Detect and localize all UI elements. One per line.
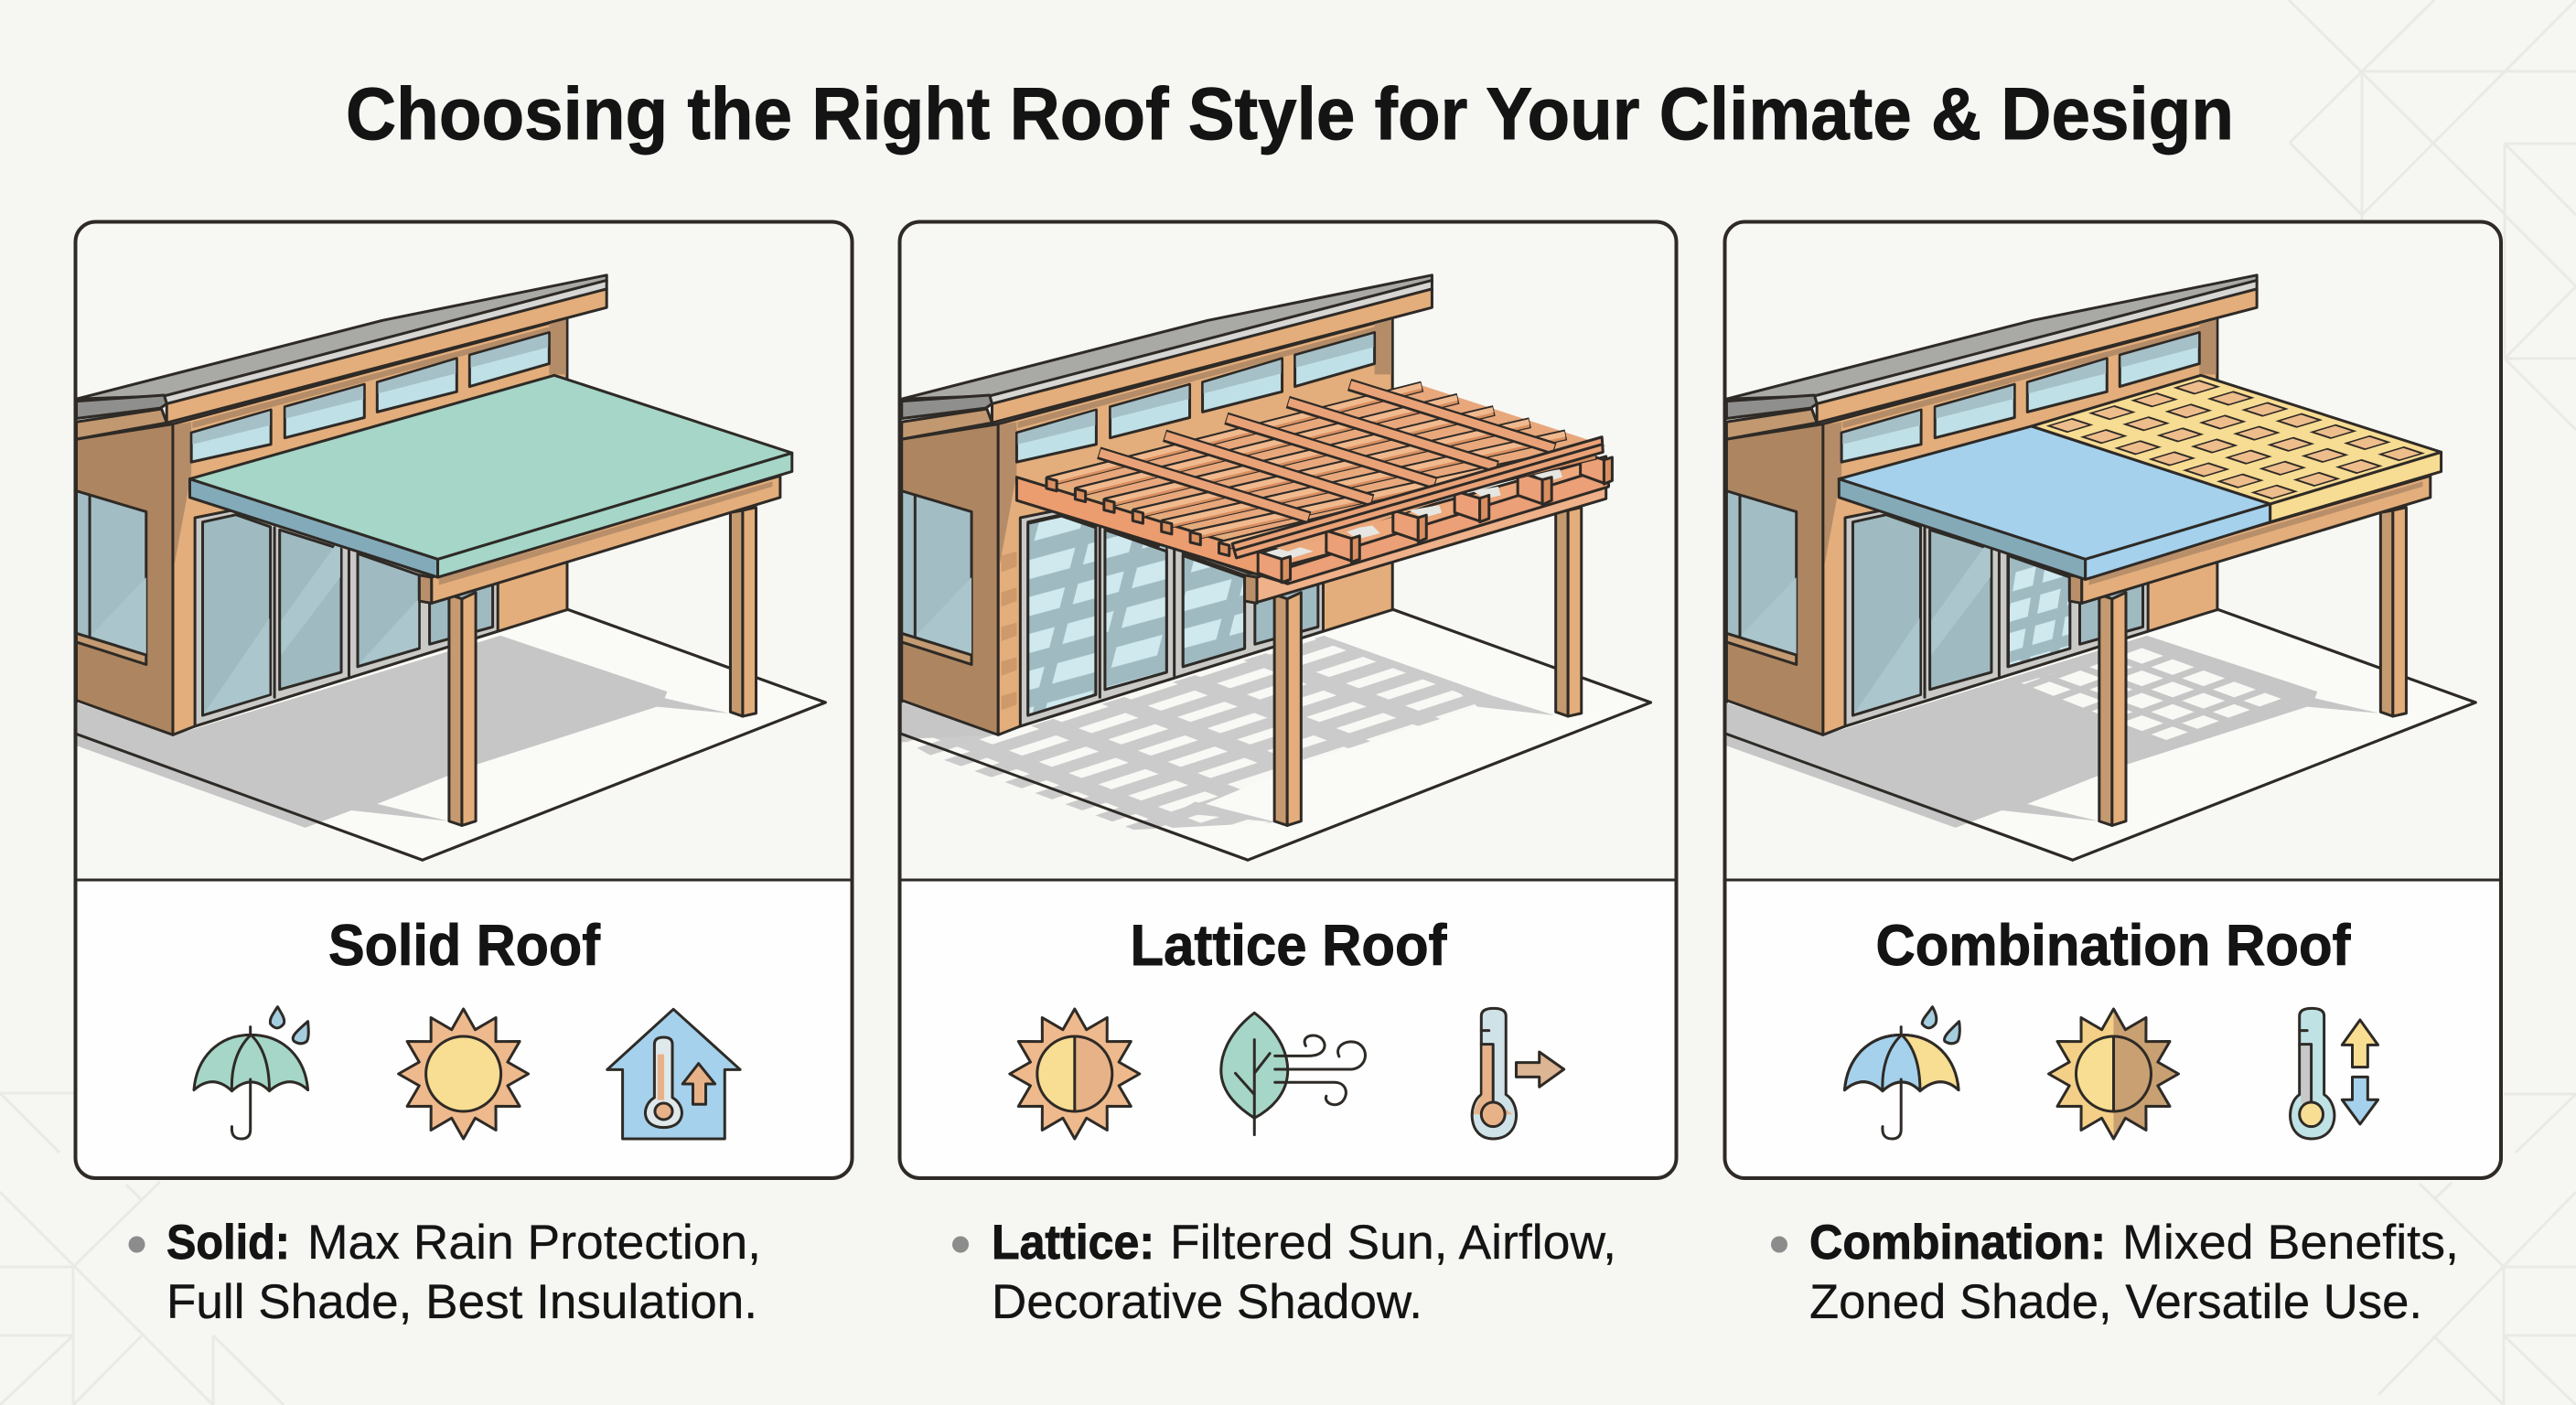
posts — [2099, 508, 2406, 825]
card background — [900, 221, 1676, 1178]
title: Choosing the Right Roof Style for Your Climate & Design — [346, 73, 2234, 156]
bullet: combination summary: Zoned Shade, Versatile Use. — [1809, 1275, 2422, 1329]
icon: umbrella with rain — [194, 1007, 308, 1139]
icon: leaf with wind — [1221, 1013, 1365, 1135]
solid roof slab — [189, 375, 792, 577]
posts — [449, 508, 756, 825]
bullet: combination summary: Mixed Benefits, — [2122, 1216, 2459, 1270]
dappled patio shadow — [902, 636, 1555, 830]
beam — [419, 476, 780, 603]
bullet: combination summary — [1771, 1216, 2459, 1329]
bullet: lattice summary: Filtered Sun, Airflow, — [1170, 1216, 1616, 1270]
heading: Combination Roof: Combination Roof — [1875, 914, 2351, 978]
bullet: lattice summary — [952, 1216, 1616, 1329]
bullet: lattice summary: Lattice: — [992, 1216, 1154, 1270]
illustration: solid roof patio — [76, 275, 825, 860]
card background — [75, 221, 853, 1178]
icon: insulated house with thermometer — [607, 1009, 740, 1139]
panel: combination roof — [1725, 221, 2501, 1329]
panel: solid roof — [75, 221, 853, 1329]
icon: two-tone umbrella with rain — [1844, 1007, 1959, 1139]
bullet: lattice summary: Decorative Shadow. — [992, 1275, 1422, 1329]
bullet: solid summary — [128, 1216, 761, 1329]
card frame — [900, 221, 1676, 1178]
dappled light on doors — [1002, 516, 1245, 715]
combination roof slab — [1839, 375, 2442, 579]
illustration: lattice roof patio — [902, 275, 1651, 860]
building — [902, 275, 1651, 860]
icon: two-tone sun — [2049, 1009, 2179, 1139]
icon: half sun — [1010, 1009, 1140, 1139]
icon: full sun — [399, 1009, 529, 1139]
filtered light on door — [2008, 556, 2070, 667]
bullet: solid summary: Solid: — [166, 1216, 290, 1270]
card frame — [75, 221, 853, 1178]
bullet: combination summary: Combination: — [1809, 1216, 2106, 1270]
icon: thermometer with up and down arrows — [2291, 1008, 2378, 1139]
patio shadow — [1726, 636, 2379, 828]
heading: Solid Roof: Solid Roof — [328, 914, 601, 978]
card background — [1725, 221, 2501, 1178]
lattice structure — [1016, 385, 1612, 603]
icon: thermometer with arrow — [1472, 1008, 1564, 1139]
building — [76, 275, 825, 860]
bullet: solid summary: Full Shade, Best Insulation. — [166, 1275, 757, 1329]
card frame — [1725, 221, 2501, 1178]
building — [1726, 275, 2475, 860]
heading: Lattice Roof: Lattice Roof — [1131, 914, 1447, 978]
illustration: combination roof patio — [1726, 275, 2475, 860]
posts — [1274, 508, 1582, 825]
bullet: solid summary: Max Rain Protection, — [307, 1216, 761, 1270]
beam — [2069, 476, 2431, 603]
patio shadow — [76, 636, 729, 828]
panel: lattice roof — [900, 221, 1676, 1329]
